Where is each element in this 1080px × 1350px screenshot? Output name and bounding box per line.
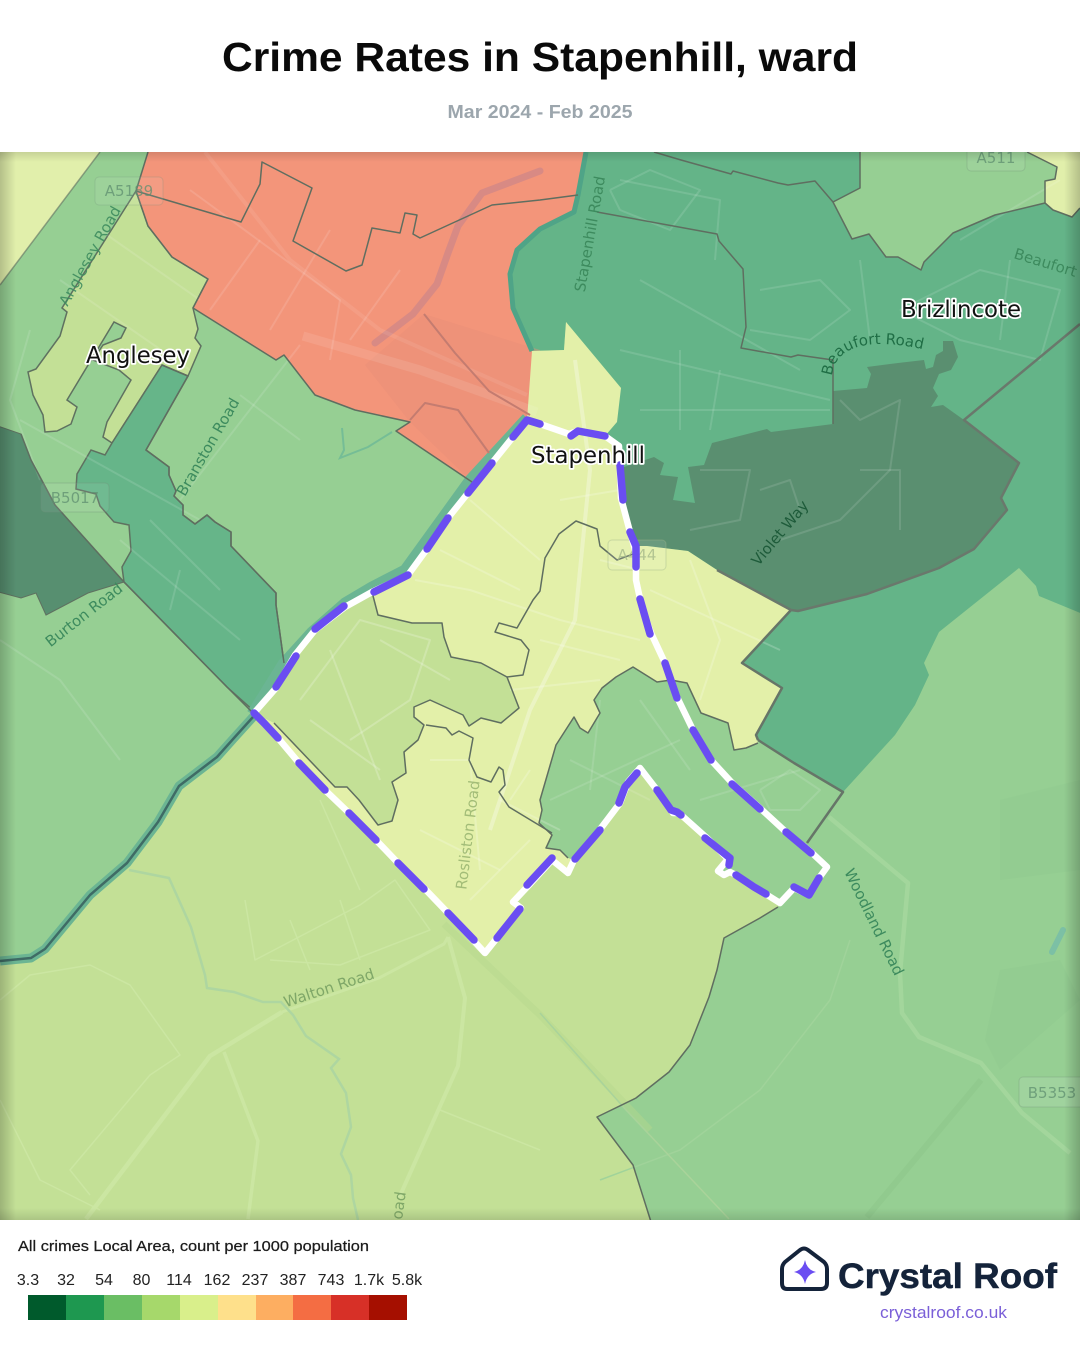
label: Stapenhill: Stapenhill bbox=[531, 443, 645, 469]
SW suburbs and lanes bbox=[0, 800, 540, 1219]
legend tick labels: 5.8k bbox=[392, 1272, 423, 1289]
label: Walton Road: Walton Road bbox=[281, 965, 377, 1011]
logo: Crystal Roof bbox=[782, 1248, 1057, 1322]
shield: A444 bbox=[608, 540, 666, 570]
street network bbox=[0, 152, 1060, 900]
shield: A511 bbox=[967, 143, 1025, 171]
sub-area boundaries bbox=[0, 152, 1080, 1225]
river bank: ward edge bbox=[252, 418, 527, 714]
label: Burton Road: Burton Road bbox=[42, 579, 126, 651]
river: Trent west channel bbox=[0, 717, 253, 961]
shield: A5189: A5189 bbox=[105, 182, 153, 200]
area: top-left corner low crime bbox=[0, 152, 100, 285]
water: small stream in parkland bbox=[340, 428, 392, 458]
stream: south-west brook bbox=[129, 870, 358, 1220]
label: partial road at map edge: oad bbox=[388, 1190, 410, 1221]
legend tick labels: 743 bbox=[318, 1272, 344, 1289]
area: town centre darker riverside bbox=[532, 348, 540, 351]
logo wordmark: Crystal Roof bbox=[838, 1257, 1057, 1296]
place labels bbox=[86, 297, 1021, 469]
shield: A5189 bbox=[95, 177, 163, 205]
area: Stapenhill ward low crime bbox=[254, 322, 791, 953]
legend tick labels: 54 bbox=[95, 1272, 113, 1289]
label: Violet Way: Violet Way bbox=[748, 497, 812, 569]
label: Stapenhill Road: Stapenhill Road bbox=[571, 175, 609, 293]
area: east dark green bbox=[742, 320, 1080, 792]
icon: house with star bbox=[782, 1248, 827, 1289]
SE roads bbox=[540, 780, 1080, 1219]
area: far west dark green bbox=[0, 425, 124, 615]
area: town centre high crime bbox=[136, 152, 586, 482]
legend colour scale bbox=[28, 1295, 407, 1320]
legend title: All crimes Local Area, count per 1000 population bbox=[18, 1238, 369, 1255]
title: Crime Rates in Stapenhill, ward bbox=[222, 34, 858, 80]
legend tick labels: 1.7k bbox=[354, 1272, 385, 1289]
area: south farmland bbox=[0, 713, 780, 1225]
legend tick labels: 114 bbox=[166, 1272, 192, 1289]
area: Violet Way darkest green bbox=[621, 341, 1019, 611]
road shields bbox=[41, 143, 1080, 1107]
railway band bbox=[623, 1102, 652, 1132]
shield: B5017: B5017 bbox=[51, 489, 99, 507]
ward boundary: white outline bbox=[254, 420, 827, 953]
label: Beaufort Road: Beaufort Road bbox=[821, 333, 924, 374]
label: Anglesey: Anglesey bbox=[86, 343, 190, 369]
subtitle: date range: Mar 2024 - Feb 2025 bbox=[448, 102, 632, 122]
area: Branston strip bbox=[76, 365, 284, 712]
area: top-right corner low crime bbox=[1027, 152, 1080, 217]
label: Woodland Road: Woodland Road bbox=[840, 866, 908, 978]
area: west Stapenhill sub-area bbox=[254, 592, 519, 825]
legend tick labels: 32 bbox=[57, 1272, 75, 1289]
legend tick labels bbox=[17, 1272, 423, 1289]
label: Anglesey Road: Anglesey Road bbox=[55, 203, 125, 309]
river bank: east channel bbox=[510, 152, 586, 351]
area: Anglesey bbox=[28, 191, 208, 443]
shield: A444: A444 bbox=[618, 546, 656, 564]
legend tick labels: 80 bbox=[133, 1272, 150, 1289]
shield: B5017 bbox=[41, 483, 109, 512]
legend tick labels: 162 bbox=[204, 1272, 230, 1289]
legend tick labels: 3.3 bbox=[17, 1272, 39, 1289]
river: Trent through town centre bbox=[375, 171, 540, 343]
legend tick labels: 387 bbox=[280, 1272, 306, 1289]
area: north-east green bbox=[510, 152, 1080, 611]
legend tick labels: 237 bbox=[242, 1272, 268, 1289]
label: Brizlincote: Brizlincote bbox=[901, 297, 1021, 323]
shield: A511: A511 bbox=[977, 149, 1015, 167]
shield: B5353: B5353 bbox=[1028, 1084, 1076, 1102]
road labels bbox=[45, 176, 1077, 1261]
shield: B5353 bbox=[1019, 1077, 1080, 1107]
legend bbox=[17, 1238, 423, 1320]
website link: crystalroof.co.uk bbox=[880, 1304, 1008, 1322]
river: dark outline bbox=[0, 717, 253, 961]
ward boundary: purple dashes bbox=[254, 420, 819, 940]
label: Branston Road: Branston Road bbox=[173, 395, 243, 499]
label: Rosliston Road: Rosliston Road bbox=[452, 779, 484, 891]
map edge fade bbox=[0, 152, 1080, 1220]
